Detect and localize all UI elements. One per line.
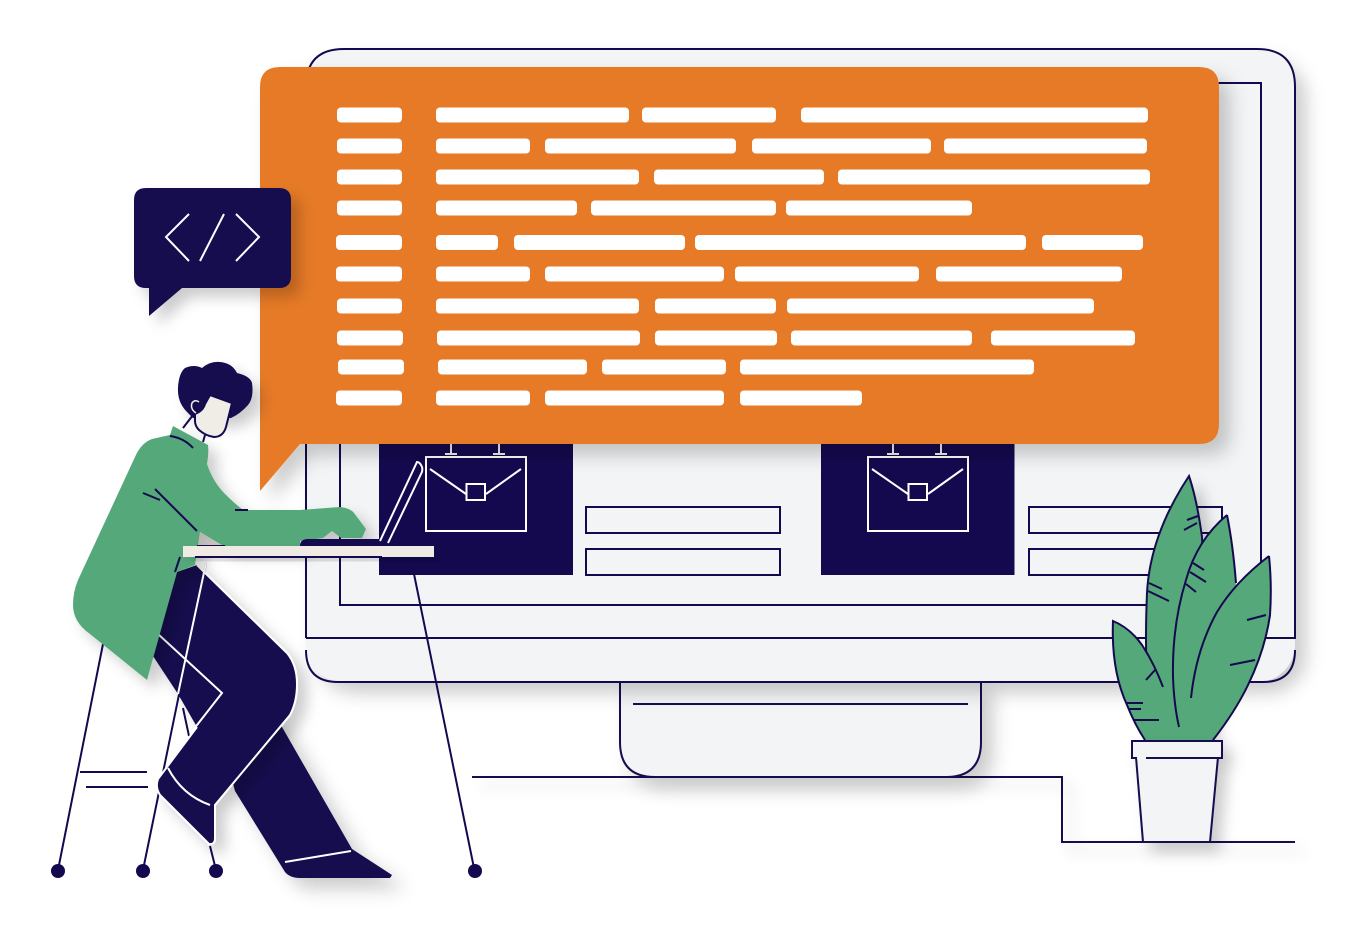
person bbox=[73, 362, 392, 878]
job card right text bars bbox=[1029, 507, 1222, 575]
code lines bbox=[436, 108, 1150, 406]
leaf: tall back bbox=[1146, 476, 1210, 742]
pot bbox=[1132, 741, 1222, 842]
stool and desk legs bbox=[51, 563, 482, 878]
face bbox=[195, 395, 232, 437]
jacket creases bbox=[143, 436, 248, 572]
leaf: middle bbox=[1173, 515, 1236, 741]
job card left bbox=[379, 440, 573, 575]
front leg and shoe bbox=[153, 565, 297, 844]
line numbers column bbox=[336, 108, 404, 406]
ear bbox=[192, 401, 199, 413]
icon: code brackets bbox=[166, 214, 259, 261]
green jacket bbox=[73, 426, 366, 680]
leaf veins bbox=[1127, 516, 1266, 720]
leaf: right bbox=[1180, 556, 1271, 741]
leg inner lines bbox=[158, 563, 222, 805]
code tag speech bubble bbox=[134, 188, 291, 316]
laptop and desk bbox=[183, 462, 434, 557]
job card left text bars bbox=[586, 507, 780, 575]
monitor bbox=[306, 49, 1295, 682]
desk top bbox=[183, 546, 434, 557]
laptop screen bbox=[380, 462, 422, 543]
shirt wedge under arm bbox=[197, 532, 227, 547]
job card right bbox=[821, 440, 1014, 575]
neck lines bbox=[183, 415, 205, 442]
back leg bbox=[200, 660, 392, 878]
monitor stand bbox=[620, 682, 981, 777]
ground line bbox=[472, 777, 1295, 842]
hair bbox=[178, 362, 252, 418]
orange code speech bubble bbox=[260, 67, 1219, 491]
laptop base bbox=[300, 539, 381, 546]
monitor screen outline bbox=[340, 83, 1261, 605]
potted plant bbox=[1113, 476, 1271, 842]
leaf: small left bbox=[1113, 621, 1180, 741]
